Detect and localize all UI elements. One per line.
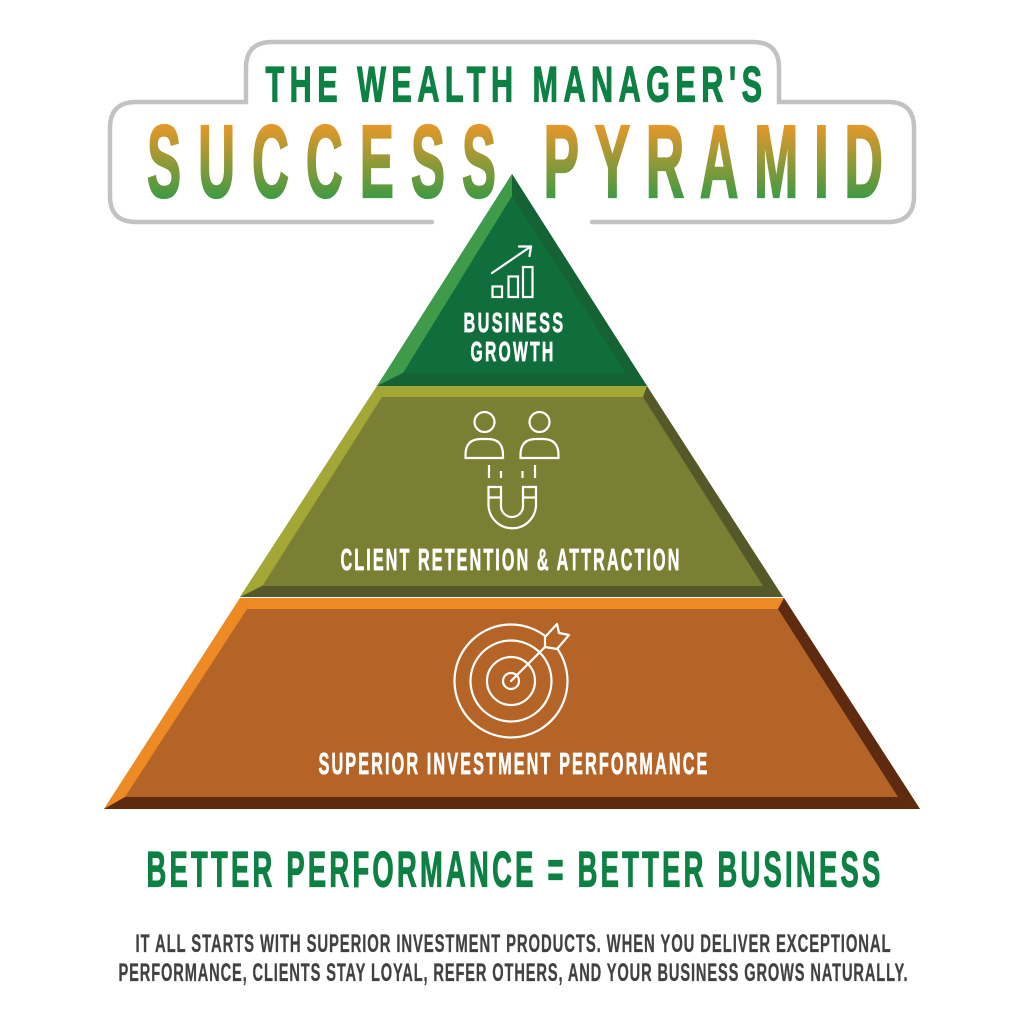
label: business growth: BUSINESS — [464, 307, 566, 338]
pyramid tier: client retention and attraction — [240, 386, 783, 597]
label: client retention and attraction: CLIENT RETENTION & ATTRACTION — [340, 542, 682, 577]
label: business growth: GROWTH — [470, 336, 556, 367]
title: success pyramid: SUCCESS — [147, 104, 513, 219]
icon: people drawn to a magnet — [466, 412, 558, 528]
body text — [118, 930, 908, 987]
title frame outline — [110, 42, 914, 222]
icon: target with arrow — [454, 624, 569, 738]
icon: growth bar chart with arrow — [492, 246, 532, 297]
pyramid tier: superior investment performance — [104, 598, 920, 809]
label: business growth — [464, 307, 566, 367]
pyramid tier: business growth — [377, 174, 647, 386]
